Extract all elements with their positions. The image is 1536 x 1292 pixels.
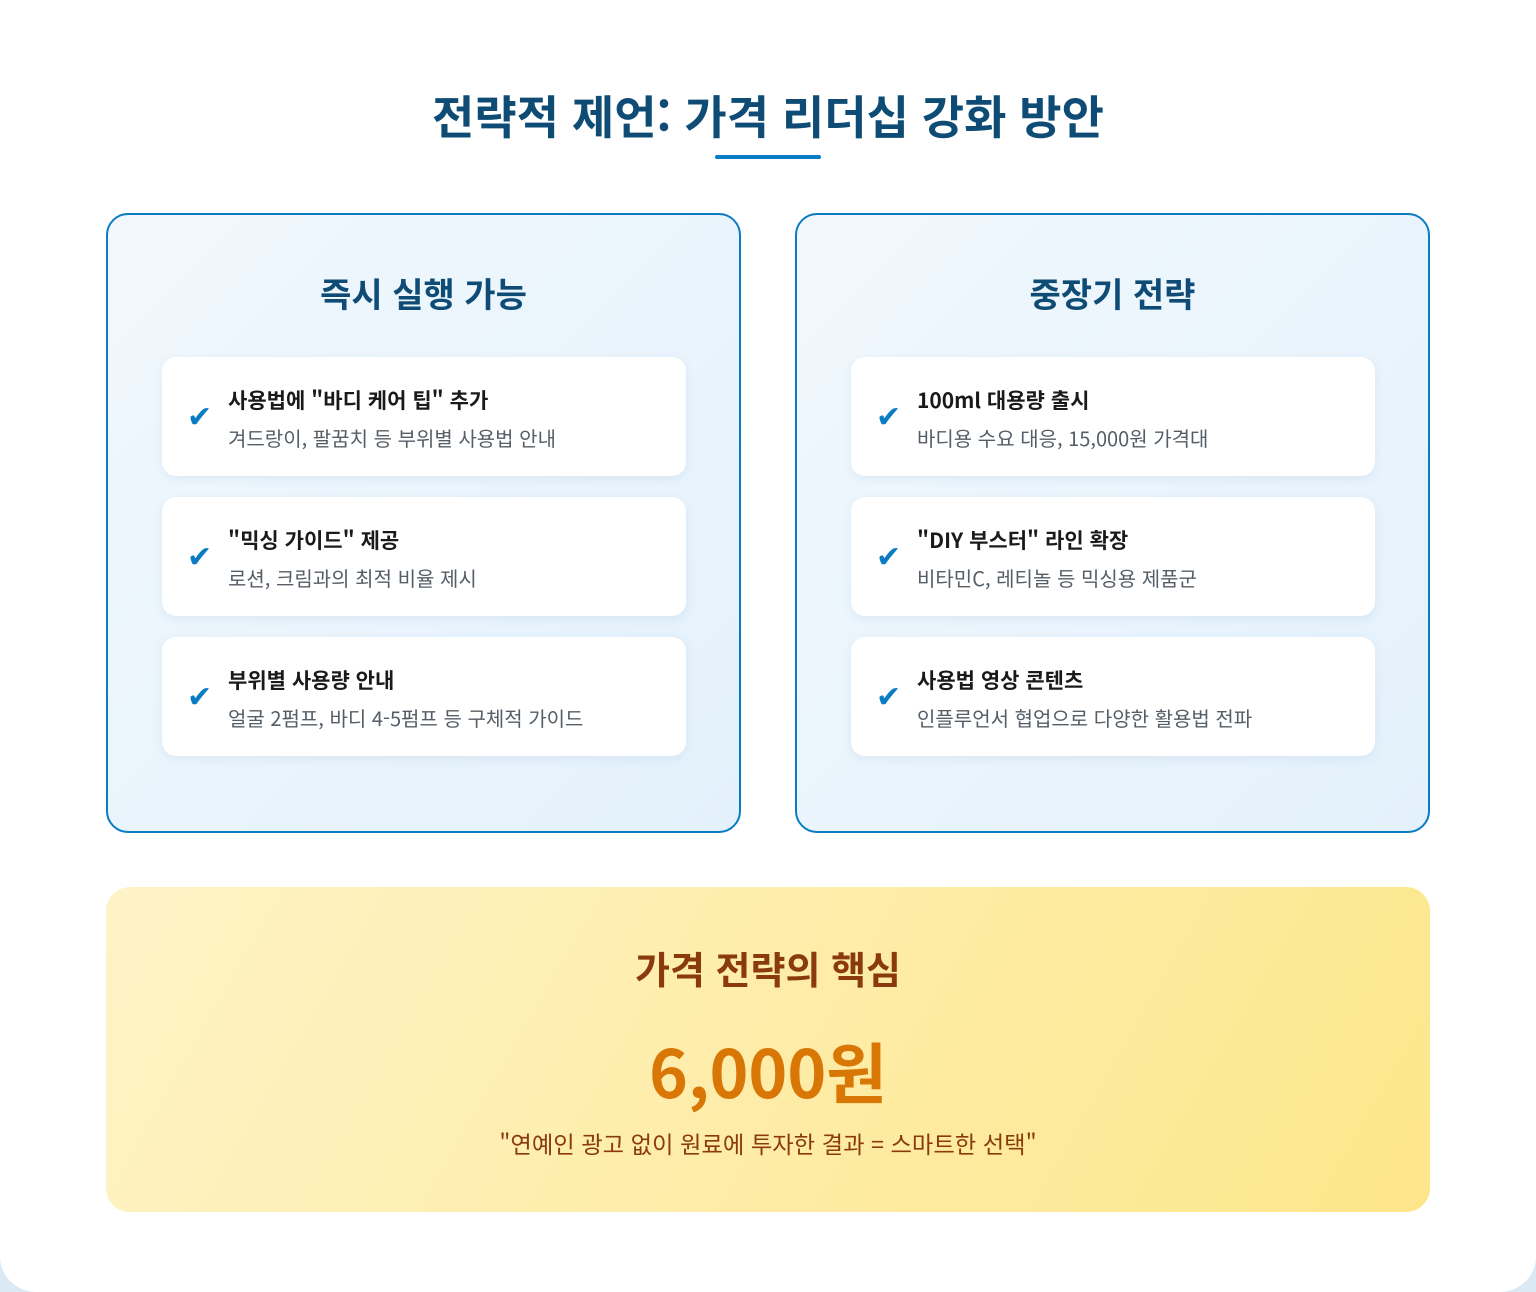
icon: check: ✔ xyxy=(187,400,212,435)
icon: check: ✔ xyxy=(876,400,901,435)
title underline xyxy=(715,155,821,159)
card title: "DIY 부스터" 라인 확장 xyxy=(917,525,1128,555)
card: mixing guide xyxy=(162,497,686,616)
card: video content xyxy=(851,637,1375,756)
icon: check: ✔ xyxy=(187,540,212,575)
title: 전략적 제언: 가격 리더십 강화 방안 xyxy=(432,82,1104,148)
card description: 바디용 수요 대응, 15,000원 가격대 xyxy=(917,423,1208,452)
card description: 인플루언서 협업으로 다양한 활용법 전파 xyxy=(917,703,1252,732)
card description: 얼굴 2펌프, 바디 4-5펌프 등 구체적 가이드 xyxy=(228,703,583,732)
icon: check: ✔ xyxy=(876,680,901,715)
icon: check: ✔ xyxy=(187,680,212,715)
card description: 비타민C, 레티놀 등 믹싱용 제품군 xyxy=(917,563,1197,592)
callout: pricing core xyxy=(106,887,1430,1212)
panel: immediate actions xyxy=(106,213,741,833)
panel heading: 즉시 실행 가능 xyxy=(320,268,527,317)
card: DIY booster xyxy=(851,497,1375,616)
card: usage amount xyxy=(162,637,686,756)
card title: 100ml 대용량 출시 xyxy=(917,385,1089,415)
icon: check: ✔ xyxy=(876,540,901,575)
panel heading: 중장기 전략 xyxy=(1030,268,1195,317)
big number: 6,000원 xyxy=(649,1022,887,1118)
card title: 부위별 사용량 안내 xyxy=(228,665,394,695)
card title: 사용법에 "바디 케어 팁" 추가 xyxy=(228,385,488,415)
card description: 로션, 크림과의 최적 비율 제시 xyxy=(228,563,477,592)
card title: "믹싱 가이드" 제공 xyxy=(228,525,399,555)
card: 100ml launch xyxy=(851,357,1375,476)
panel: mid-long term strategy xyxy=(795,213,1430,833)
callout heading: 가격 전략의 핵심 xyxy=(635,940,901,995)
quote: "연예인 광고 없이 원료에 투자한 결과 = 스마트한 선택" xyxy=(499,1126,1037,1160)
card: body care tip xyxy=(162,357,686,476)
card title: 사용법 영상 콘텐츠 xyxy=(917,665,1083,695)
card description: 겨드랑이, 팔꿈치 등 부위별 사용법 안내 xyxy=(228,423,556,452)
